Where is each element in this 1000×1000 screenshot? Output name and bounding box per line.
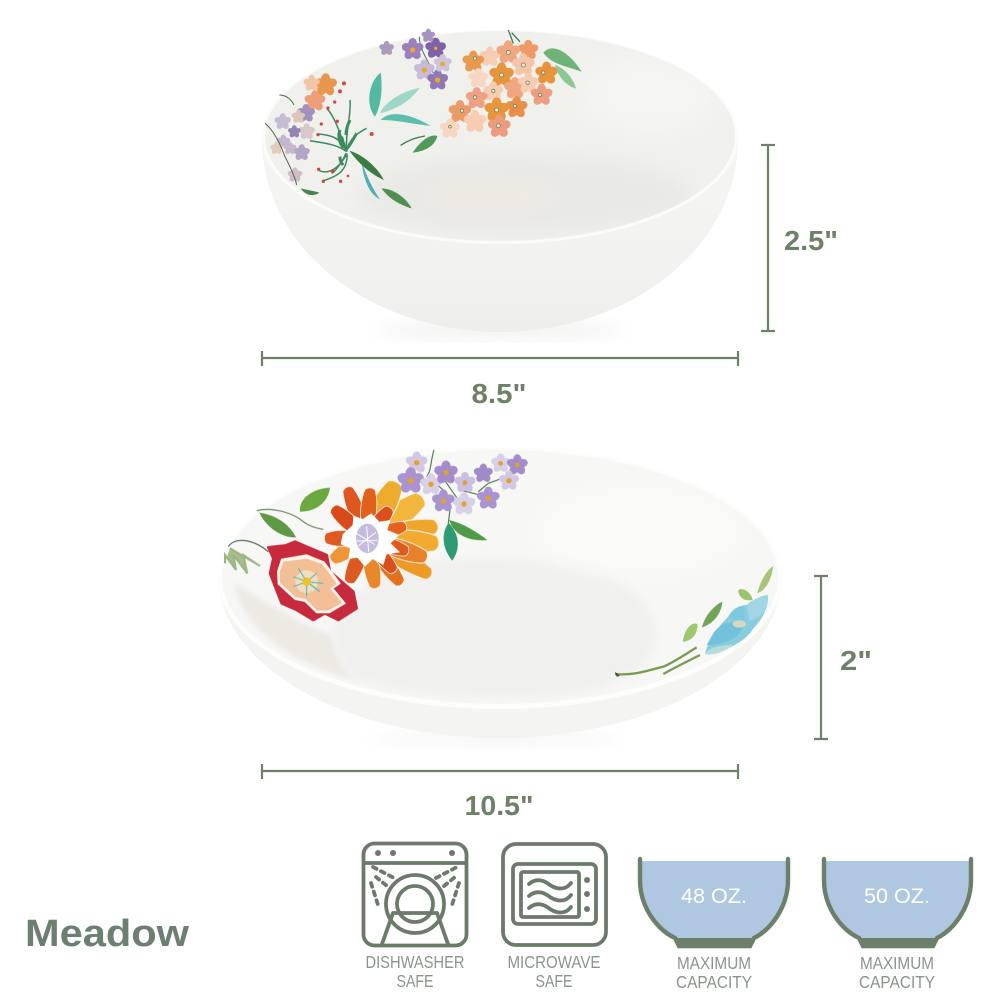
label: maximum capacity 1: CAPACITY [676, 972, 752, 992]
label: dishwasher safe: SAFE [396, 971, 434, 991]
icon: bowl capacity 50 oz: 50 OZ. [864, 885, 930, 908]
label: maximum capacity 1: MAXIMUM [677, 953, 751, 973]
label: maximum capacity 2 [859, 953, 935, 992]
bowl 1 exterior [262, 140, 738, 332]
icon: microwave safe [503, 844, 606, 945]
label: maximum capacity 1 [676, 953, 752, 992]
bowl 1 photo [262, 29, 738, 338]
dimension: bowl 1 width: 8.5" [472, 378, 526, 409]
stems and leaves [225, 488, 330, 573]
bowl 2 large floral decoration [225, 450, 529, 620]
label: microwave safe [508, 952, 600, 991]
dimension: bowl 2 width: 10.5" [464, 790, 534, 821]
teal and green sprig [301, 73, 431, 208]
bowl 1 rim and interior [262, 30, 738, 244]
bowl 2 photo [218, 447, 782, 745]
label: maximum capacity 2: CAPACITY [859, 972, 935, 992]
purple flowers [379, 29, 453, 91]
bowl 2 body [218, 575, 782, 738]
label: dishwasher safe [366, 952, 464, 991]
dimension: bowl 2 height: 2" [840, 645, 872, 676]
left orange and purple flowers [265, 73, 338, 185]
label: dishwasher safe: DISHWASHER [366, 952, 464, 972]
dimension: bowl 2 height [814, 576, 872, 739]
orange flower cluster [439, 30, 559, 139]
purple flower spray [396, 450, 529, 561]
red peony flower [268, 542, 357, 620]
pattern name: Meadow [25, 913, 189, 955]
icon: bowl capacity 48 oz [640, 859, 788, 946]
dimension: bowl 1 width [262, 351, 738, 409]
bowl 2 blue flower decoration [615, 566, 773, 677]
label: maximum capacity 2: MAXIMUM [860, 953, 934, 973]
label: microwave safe: SAFE [536, 971, 572, 991]
icon: dishwasher safe [364, 844, 466, 946]
dimension: bowl 1 height: 2.5" [784, 225, 838, 256]
dimension: bowl 2 width [262, 764, 738, 821]
icon: bowl capacity 50 oz [824, 859, 971, 946]
bowl 1 floral decoration [265, 29, 582, 208]
icon: bowl capacity 48 oz: 48 OZ. [681, 885, 747, 908]
label: microwave safe: MICROWAVE [508, 952, 600, 972]
dimension: bowl 1 height [761, 145, 838, 331]
green leaves [401, 48, 582, 153]
orange dahlia flower [324, 476, 440, 590]
bowl 2 rim and well [218, 447, 782, 709]
